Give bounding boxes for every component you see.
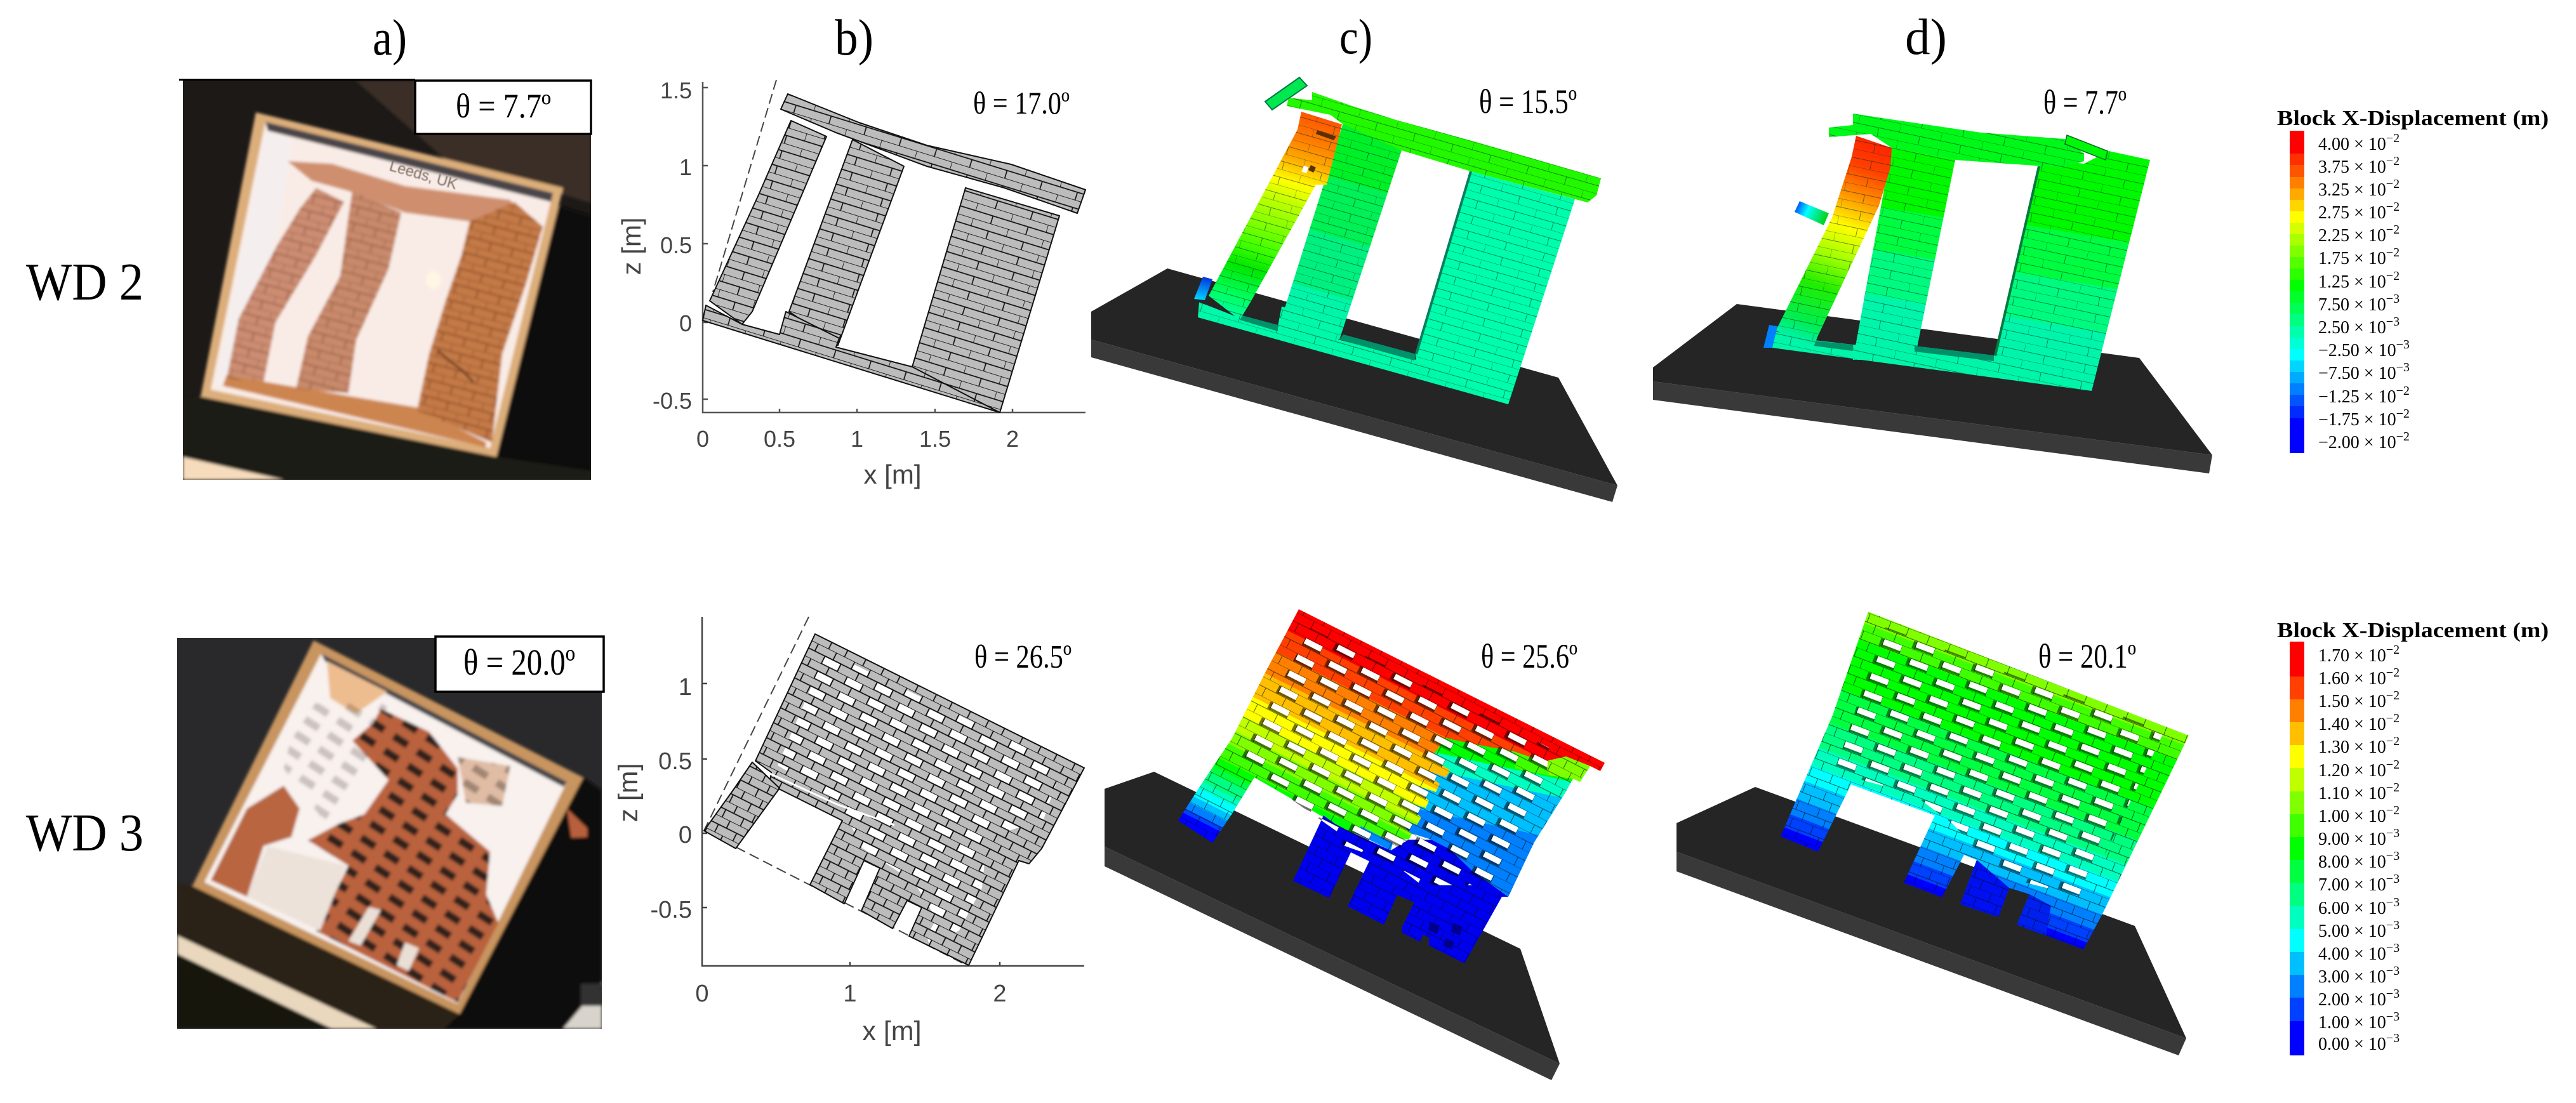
base plate — [1091, 268, 1617, 485]
scale values: 7.50 × 10 — [2318, 295, 2386, 315]
angle text d2: θ = 20.1º — [2038, 637, 2136, 675]
column label b): b) — [835, 10, 873, 66]
scale values: −3 — [2386, 872, 2400, 886]
lower blue block — [1293, 816, 1508, 963]
photo: WD 3 experiment — [177, 638, 602, 1029]
scale values: −1.25 × 10 — [2318, 387, 2396, 407]
angle text b2: θ = 26.5º — [974, 639, 1072, 675]
legend: WD 3 colour scale — [2277, 619, 2549, 1055]
small strips — [1335, 817, 1393, 850]
angle text b1: θ = 17.0º — [973, 85, 1070, 121]
top beam — [1287, 92, 1601, 202]
base course — [1198, 302, 1508, 404]
scale values: −2 — [2396, 430, 2410, 444]
scale values — [2318, 643, 2400, 1054]
scale values: 1.60 × 10 — [2318, 669, 2386, 689]
scale values: −3 — [2386, 1010, 2400, 1024]
scale values: 0.00 × 10 — [2318, 1034, 2386, 1054]
scale values: −2 — [2386, 666, 2400, 680]
scale values: 1.20 × 10 — [2318, 761, 2386, 781]
right sky-blue block — [1394, 738, 1590, 897]
3D model d WD 3 — [1676, 612, 2189, 1055]
legend title: Block X-Displacement (m) — [2277, 619, 2549, 642]
axes — [702, 617, 1084, 966]
colour bar — [2290, 642, 2304, 1055]
scale values: −3 — [2386, 849, 2400, 863]
scale values: −2 — [2386, 131, 2400, 145]
column label a): a) — [373, 10, 407, 66]
right pier — [1994, 151, 2150, 391]
x tick labels: 1.5 — [919, 426, 951, 452]
x tick labels: 0 — [696, 426, 709, 452]
angle text c1: θ = 15.5º — [1479, 83, 1577, 121]
scale values: 1.30 × 10 — [2318, 737, 2386, 757]
z axis title: z [m] — [613, 763, 644, 822]
small blue brick — [1194, 277, 1212, 300]
brick lines — [1178, 609, 1605, 963]
x tick labels: 2 — [1006, 426, 1019, 452]
scale values: −1.75 × 10 — [2318, 410, 2396, 430]
x tick labels — [696, 426, 1019, 452]
scale values: −2 — [2396, 384, 2410, 398]
scale values — [2318, 131, 2410, 452]
angle box: 20.0 — [435, 637, 604, 692]
x axis title: x [m] — [863, 459, 922, 489]
window holes — [1835, 626, 2164, 896]
scale values: 1.75 × 10 — [2318, 249, 2386, 268]
base plate — [1105, 772, 1560, 1064]
scale values: −2 — [2386, 177, 2400, 191]
3D model d WD 2 — [1653, 114, 2212, 473]
scale values: −3 — [2386, 918, 2400, 932]
dashed reference line — [713, 80, 776, 292]
scale values: 1.00 × 10 — [2318, 1013, 2386, 1033]
dashed reference lines — [704, 617, 966, 965]
scale values: −3 — [2386, 292, 2400, 306]
scale values: 1.25 × 10 — [2318, 272, 2386, 292]
scale values: 9.00 × 10 — [2318, 829, 2386, 849]
scale values: 1.40 × 10 — [2318, 715, 2386, 734]
scale values: −2 — [2386, 269, 2400, 283]
y tick labels: 0.5 — [658, 748, 692, 775]
scale values: 4.00 × 10 — [2318, 944, 2386, 964]
3D model c WD 3 — [1105, 609, 1605, 1080]
photo: WD 2 experiment — [183, 81, 591, 480]
scale values: −2 — [2386, 781, 2400, 795]
scale values: −3 — [2396, 338, 2410, 352]
scale values: 3.75 × 10 — [2318, 157, 2386, 177]
y tick labels: 0.5 — [660, 232, 692, 258]
scale values: −2 — [2386, 803, 2400, 817]
scale values: 1.70 × 10 — [2318, 646, 2386, 666]
scale values: −2 — [2386, 689, 2400, 703]
scale values: 4.00 × 10 — [2318, 135, 2386, 154]
scale values: −2.50 × 10 — [2318, 341, 2396, 360]
scale values: 1.00 × 10 — [2318, 807, 2386, 826]
angle text c2: θ = 25.6º — [1481, 637, 1577, 675]
y tick labels: -0.5 — [651, 897, 692, 923]
wall displacement colours — [1178, 609, 1605, 843]
scale values: 6.00 × 10 — [2318, 899, 2386, 918]
scale values: −2 — [2386, 246, 2400, 260]
scale values: −3 — [2386, 964, 2400, 978]
x tick labels: 0.5 — [764, 426, 795, 452]
left pier — [1776, 136, 1892, 345]
scale values: −3 — [2386, 987, 2400, 1001]
row label WD 3: WD 3 — [26, 803, 143, 862]
dark recesses in lower block — [1428, 921, 1463, 949]
x tick labels — [695, 981, 1007, 1007]
flying brick — [1795, 201, 1829, 225]
left pier — [1209, 112, 1342, 320]
row label WD 2: WD 2 — [26, 253, 143, 312]
scale values: −2 — [2386, 711, 2400, 725]
scale values: 3.00 × 10 — [2318, 967, 2386, 987]
window holes — [778, 651, 1063, 948]
y tick labels: -0.5 — [653, 388, 692, 414]
column label c): c) — [1339, 9, 1372, 64]
angle text d1: θ = 7.7º — [2043, 83, 2127, 121]
chart: block model WD 2 — [616, 77, 1086, 489]
angle box: 7.7 — [415, 81, 591, 134]
bricks — [704, 634, 1084, 965]
scale values: −2 — [2386, 734, 2400, 748]
window holes — [1238, 628, 1549, 885]
top edge line of photo — [179, 79, 415, 81]
scale values: −3 — [2396, 360, 2410, 374]
scale values: −2.00 × 10 — [2318, 433, 2396, 452]
scale values: −2 — [2386, 643, 2400, 657]
scale values: 1.10 × 10 — [2318, 784, 2386, 803]
y tick labels: 1 — [679, 674, 692, 701]
scale values: 5.00 × 10 — [2318, 921, 2386, 941]
base plate — [1676, 787, 2186, 1038]
scale values: −3 — [2386, 315, 2400, 329]
scale values: −3 — [2386, 1031, 2400, 1045]
legend title: Block X-Displacement (m) — [2277, 107, 2549, 130]
axes — [703, 82, 1086, 413]
scale values: −3 — [2386, 941, 2400, 955]
3D model c WD 2 — [1091, 77, 1617, 502]
scale values: −3 — [2386, 826, 2400, 840]
"Leeds, UK" label in photo: Leeds, UK — [387, 157, 459, 193]
top beam — [1829, 114, 2084, 168]
scale values: −2 — [2386, 154, 2400, 168]
y tick labels: 0 — [679, 822, 692, 849]
scale values: −2 — [2386, 758, 2400, 772]
scale values: 1.50 × 10 — [2318, 692, 2386, 711]
column label d): d) — [1905, 10, 1947, 65]
scale values: −2 — [2396, 407, 2410, 421]
scale values: −2 — [2386, 200, 2400, 214]
chart: block model WD 3 — [613, 617, 1084, 1047]
scale values: 2.75 × 10 — [2318, 203, 2386, 223]
scale values: 2.00 × 10 — [2318, 990, 2386, 1010]
wall displacement colours — [1781, 612, 2189, 949]
scale values: −7.50 × 10 — [2318, 364, 2396, 383]
y tick labels — [651, 674, 692, 923]
flying brick — [1265, 77, 1307, 110]
angle box: 7.7: θ = 7.7º — [456, 87, 551, 125]
middle pier — [1853, 148, 1955, 360]
angle box: 20.0: θ = 20.0º — [463, 642, 575, 683]
scale values: −2 — [2386, 223, 2400, 237]
scale values: 2.50 × 10 — [2318, 318, 2386, 338]
tilted beam brick — [2065, 135, 2108, 160]
base plate — [1653, 304, 2212, 455]
x tick labels: 1 — [851, 426, 863, 452]
x tick labels: 2 — [993, 981, 1007, 1007]
scale values: 8.00 × 10 — [2318, 852, 2386, 872]
scale values: 7.00 × 10 — [2318, 875, 2386, 895]
z axis title: z [m] — [616, 217, 646, 275]
x tick labels: 0 — [695, 981, 709, 1007]
x axis title: x [m] — [862, 1016, 922, 1047]
scale values: 2.25 × 10 — [2318, 226, 2386, 246]
scale values: −3 — [2386, 895, 2400, 909]
y tick labels — [653, 77, 692, 414]
crack line — [770, 774, 894, 825]
lower blue blocks — [1960, 860, 2051, 935]
base course — [1772, 331, 2092, 391]
small blue brick — [1763, 325, 1777, 348]
brick lines — [1781, 612, 2189, 949]
y tick labels: 1.5 — [660, 77, 692, 103]
y tick labels: 1 — [679, 154, 692, 180]
right pier — [1414, 171, 1575, 404]
scale values: 3.25 × 10 — [2318, 180, 2386, 200]
legend: WD 2 colour scale — [2277, 107, 2549, 453]
bricks — [703, 94, 1086, 413]
colour bar — [2290, 131, 2304, 453]
x tick labels: 1 — [843, 981, 857, 1007]
lime bricks at right end — [1512, 751, 1590, 782]
middle pier — [1282, 122, 1402, 340]
y tick labels: 0 — [679, 310, 692, 336]
